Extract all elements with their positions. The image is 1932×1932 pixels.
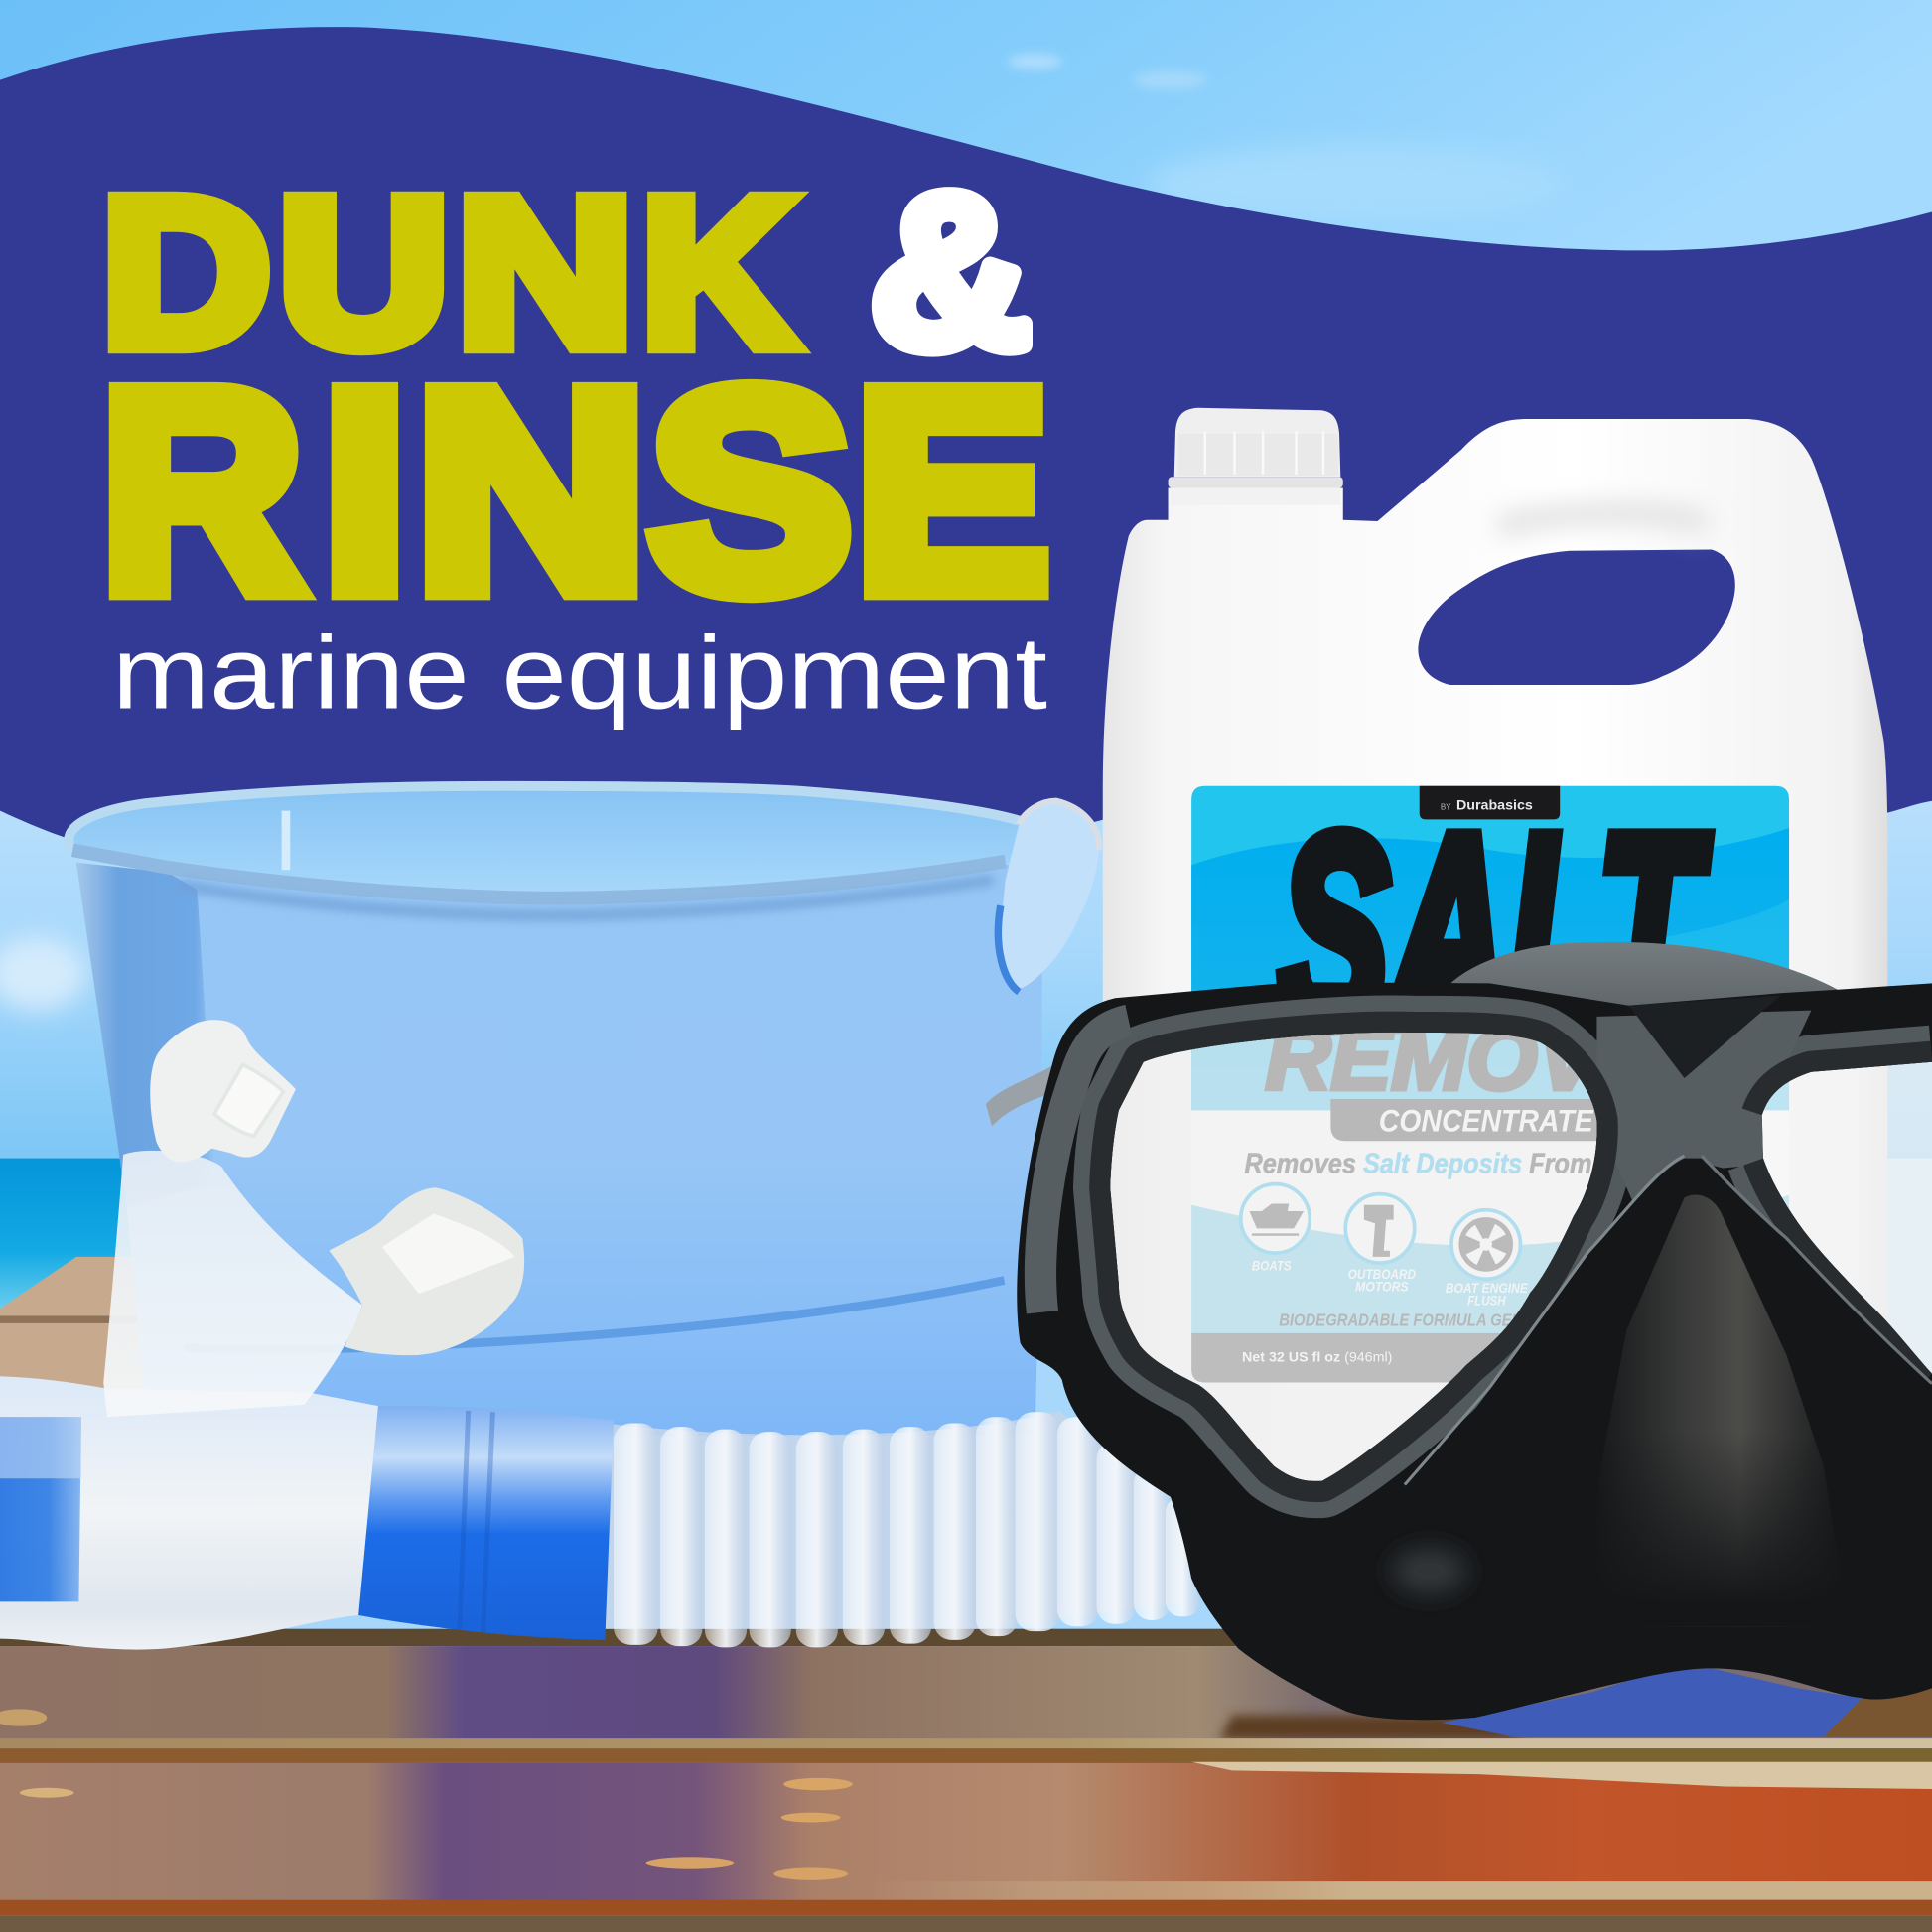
icon: outboard motor: [1345, 1194, 1415, 1263]
icon label: boat engine flush: BOAT ENGINE: [1446, 1281, 1529, 1296]
icon label: outboard motors: OUTBOARD: [1348, 1267, 1416, 1282]
heading word: RINSE: N: [416, 331, 647, 649]
mask bridge: [1596, 1011, 1811, 1201]
heading word: RINSE: R: [101, 331, 303, 649]
icon label: boat engine flush: FLUSH: [1467, 1293, 1507, 1308]
lower mouthpiece highlight: [382, 1213, 515, 1294]
galvanized bucket: [69, 786, 1099, 1436]
label: net contents: Net 32 US fl oz (946ml): [1242, 1349, 1392, 1365]
label: biodegradable line: BIODEGRADABLE FORMULA GENTLE: [1279, 1310, 1551, 1329]
mask skirt top: [1442, 942, 1840, 1023]
label claim line: Removes Salt Deposits From: [1244, 1148, 1591, 1179]
brand tab: [1420, 786, 1560, 819]
mask strap buckle: [986, 1013, 1094, 1126]
mask body: [1017, 982, 1932, 1720]
brand tab: BY: [1441, 802, 1451, 811]
concentrate pill: [1330, 1099, 1725, 1141]
heading word: DUNK: U: [279, 154, 449, 389]
upper mouthpiece bite: [150, 1020, 296, 1163]
background: sky: [0, 0, 1932, 1528]
icon label: boats: BOATS: [1252, 1259, 1292, 1274]
heading word: RINSE: S: [649, 331, 852, 649]
frame inner dark edge: [1110, 1033, 1932, 1481]
bucket body: [76, 863, 1042, 1436]
wooden deck: [0, 1257, 1932, 1932]
concentrate pill: CONCENTRATE: [1379, 1103, 1594, 1138]
bucket handle ear: [998, 801, 1099, 992]
corrugated hose: [604, 1411, 1200, 1647]
icon label: outboard motors: MOTORS: [1355, 1280, 1409, 1295]
icon: boat: [1241, 1184, 1310, 1253]
bridge dark wedge: [1629, 996, 1780, 1078]
mask frame band: [1110, 996, 1932, 1481]
heading: dunk and rinse: [101, 149, 1049, 732]
icon label: outboard motors: [1348, 1267, 1416, 1295]
blue connector: [358, 1406, 614, 1640]
frame outer ridge: [1110, 1033, 1932, 1481]
heading word: ampersand: &: [871, 149, 1031, 393]
lower mouthpiece bite: [329, 1187, 524, 1355]
lens glass right: [1762, 1062, 1932, 1374]
purge stem: [103, 1151, 362, 1417]
jug body: [1103, 419, 1887, 1484]
lens glass left: [1110, 1033, 1597, 1481]
background: sea: [0, 1159, 160, 1312]
heading word: DUNK: D: [102, 154, 270, 389]
bucket lower ridge: [185, 1280, 1004, 1349]
jug shading near handle: [1497, 513, 1707, 527]
jug cap: [1169, 408, 1343, 505]
subheading: marine equipment: [112, 617, 1047, 732]
heading word: DUNK: N: [457, 154, 633, 389]
brand word REMOVER: REMOVER: [1266, 1009, 1724, 1108]
snorkel: [0, 1020, 1200, 1650]
skirt highlight: [1392, 1549, 1466, 1593]
heading word: DUNK: K: [642, 154, 795, 389]
icon label: boat engine flush: [1446, 1281, 1529, 1308]
bucket seam inside: [282, 811, 289, 870]
product: jug of salt remover: [1103, 408, 1887, 1484]
heading word: RINSE: E: [856, 331, 1049, 649]
tube blue band: [0, 1417, 81, 1601]
nose pocket: [1380, 1156, 1932, 1651]
bucket left fold: [76, 863, 215, 1207]
heading word: RINSE: I: [323, 331, 407, 649]
tube body: [0, 1376, 378, 1650]
mask outer frame highlight: [1040, 1021, 1129, 1312]
dive mask: [986, 942, 1932, 1720]
brand tab: Durabasics: [1456, 797, 1533, 813]
bucket interior: [69, 787, 1035, 899]
navy wave banner: [0, 27, 1932, 850]
upper mouthpiece highlight: [214, 1064, 283, 1136]
bucket rim: [69, 786, 1019, 850]
jug label: [1191, 779, 1789, 1382]
icon: propeller: [1451, 1210, 1520, 1279]
